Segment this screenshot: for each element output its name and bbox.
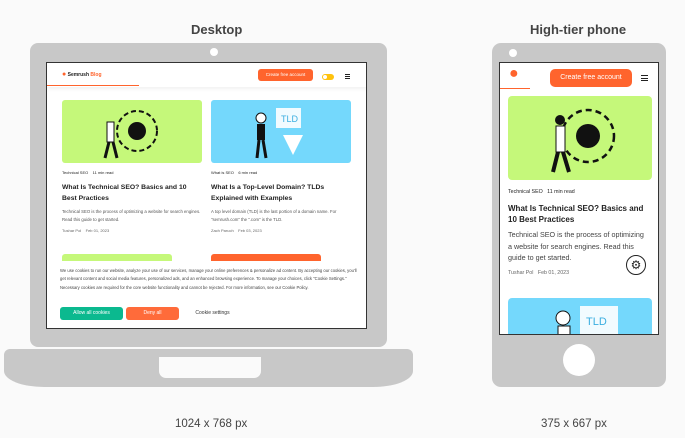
phone header	[500, 65, 648, 89]
create account button: Create free account	[560, 74, 622, 81]
cookie banner	[47, 261, 367, 331]
card image blue: TLD	[281, 114, 299, 124]
phone tags: Technical SEO 11 min read	[508, 189, 575, 195]
gear icon	[626, 255, 646, 275]
laptop notch	[159, 357, 261, 378]
deny button	[126, 307, 179, 320]
laptop base	[4, 349, 413, 387]
settings button: Cookie settings	[195, 310, 230, 316]
title: What Is Technical SEO? Basics and 10 Best Practices	[62, 184, 187, 202]
header	[47, 63, 367, 87]
tags: What is SEO 6 min read	[211, 170, 257, 175]
next card images	[62, 254, 172, 264]
phone device	[492, 43, 666, 387]
title: Desktop: Desktop	[191, 22, 242, 37]
create account button	[258, 69, 313, 81]
logo: ● Semrush Blog	[62, 71, 102, 78]
card image blue	[211, 100, 351, 163]
phone author: Tushar Pol Feb 01, 2023	[508, 270, 569, 276]
phone description: Technical SEO is the process of optimizing a website for search engines. Read this guide to get started.	[508, 230, 644, 262]
phone card image	[508, 96, 652, 180]
phone screen	[499, 62, 659, 335]
logo: ●	[509, 65, 519, 82]
phone camera	[509, 49, 517, 57]
allow button	[60, 307, 123, 320]
author: Tushar Pol Feb 01, 2023	[62, 228, 109, 233]
laptop lid	[30, 43, 387, 347]
caption: phone resolution: 375 x 667 px	[541, 418, 607, 430]
card image green	[62, 100, 202, 163]
home button	[563, 344, 595, 376]
card 2	[211, 100, 351, 233]
phone second card image	[508, 298, 652, 334]
title: High-tier phone: High-tier phone	[530, 22, 626, 37]
laptop camera	[210, 48, 218, 56]
allow button: Allow all cookies	[73, 310, 110, 316]
hamburger	[641, 75, 648, 81]
caption: desktop resolution: 1024 x 768 px	[175, 418, 247, 430]
phone second card image: TLD	[586, 316, 607, 328]
desktop screen	[46, 62, 367, 329]
title: What Is a Top-Level Domain? TLDs Explained with Examples	[211, 184, 324, 202]
phone title: What Is Technical SEO? Basics and 10 Best Practices	[508, 204, 643, 224]
laptop device	[4, 43, 413, 387]
description: A top level domain (TLD) is the last portion of a domain name. For "semrush.com" the ".com" is the TLD.	[211, 209, 336, 222]
hamburger	[345, 74, 350, 79]
gear icon: ⚙	[631, 258, 641, 272]
tags: Technical SEO 11 min read	[62, 170, 114, 175]
toggle	[322, 74, 334, 80]
create account button	[550, 69, 632, 87]
description: Technical SEO is the process of optimizing a website for search engines. Read this guide to get started.	[62, 209, 200, 222]
deny button: Deny all	[143, 310, 162, 316]
author: Zach Paruch Feb 03, 2023	[211, 228, 262, 233]
cookie text: We use cookies to run our website, analyze your use of our services, manage your online preferences & personalize ad content. By accepting our cookies, you'll get relevant content and social media features, personalized ads, and an enhanced browsing experience. To manage your choices, click "Cookie Settings." Necessary cookies are required for the core website functionality and cannot be rejected. For more information, see our Cookie Policy.	[60, 268, 357, 290]
card 1	[62, 100, 202, 233]
create account button: Create free account	[266, 72, 305, 77]
